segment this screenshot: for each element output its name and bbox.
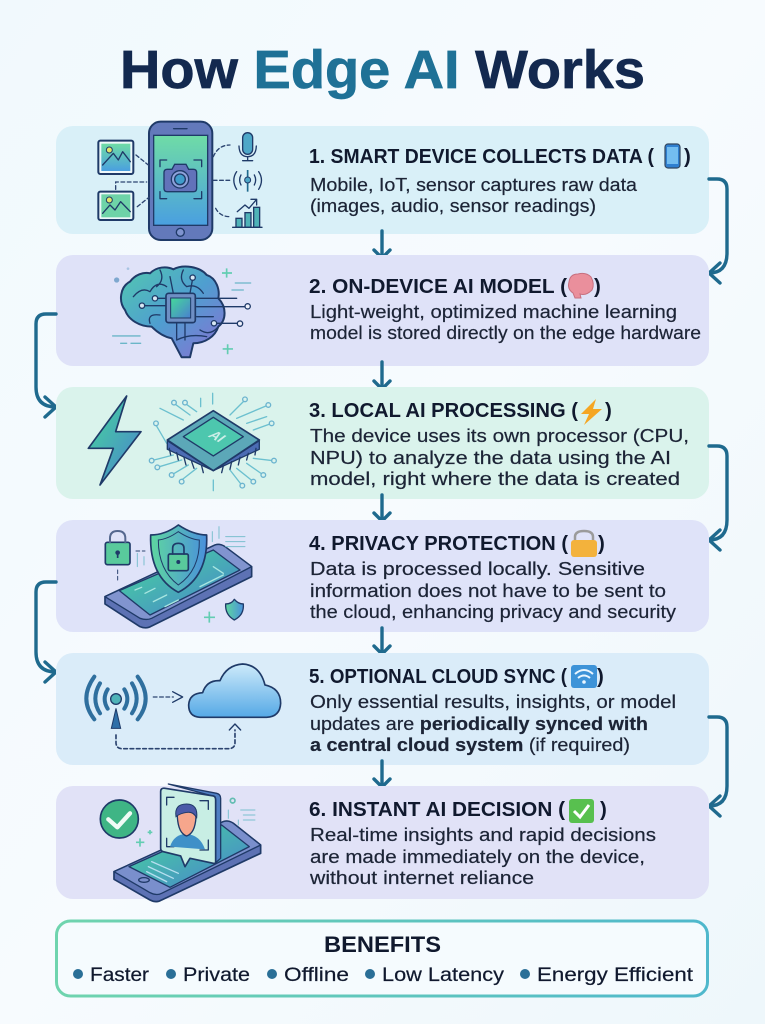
panel: step 3 local processing bbox=[56, 387, 709, 499]
panel: step 1 smart device bbox=[56, 122, 709, 240]
step 4 description: Data is processed locally. Sensitive bbox=[310, 559, 645, 579]
step 3 description: The device uses its own processor (CPU, bbox=[310, 426, 689, 446]
arrow: 1 to 2 side bbox=[709, 179, 727, 283]
step 6 description: are made immediately on the device, bbox=[310, 847, 645, 867]
step 3 description: model, right where the data is created bbox=[310, 469, 680, 489]
step 2 description bbox=[310, 302, 701, 343]
benefit: Energy Efficient: Energy Efficient bbox=[537, 965, 694, 986]
step 5 description: updates are periodically synced with bbox=[310, 714, 648, 734]
benefit: Offline bbox=[267, 965, 349, 986]
panel: step 4 privacy bbox=[56, 520, 709, 632]
step 3 heading: ) bbox=[605, 399, 612, 422]
step 5 heading: ) bbox=[597, 665, 604, 688]
arrow: 2 to 3 side bbox=[36, 314, 56, 417]
step 4 description: the cloud, enhancing privacy and security bbox=[310, 602, 676, 622]
arrow: 5 to 6 down bbox=[374, 761, 390, 787]
arrow: 2 to 3 down bbox=[374, 362, 390, 389]
arrow: 4 to 5 down bbox=[374, 628, 390, 654]
arrow: 3 to 4 side bbox=[709, 446, 727, 550]
step 3 description: NPU) to analyze the data using the AI bbox=[310, 448, 671, 468]
step 6 description: Real-time insights and rapid decisions bbox=[310, 825, 656, 845]
benefit: Faster: Faster bbox=[90, 965, 150, 986]
step 6 description: without internet reliance bbox=[309, 868, 534, 888]
emoji: check mark bbox=[569, 799, 594, 823]
arrow: 5 to 6 side bbox=[709, 717, 727, 816]
step 6 description bbox=[309, 825, 656, 888]
icon: bolt and AI chip bbox=[88, 393, 276, 491]
arrow: 4 to 5 side bbox=[36, 582, 56, 682]
step 1 heading: 1. SMART DEVICE COLLECTS DATA ( bbox=[309, 145, 654, 168]
icon: phone with shield bbox=[105, 525, 252, 628]
step 5 description bbox=[310, 692, 676, 755]
emoji: mobile phone bbox=[665, 144, 680, 168]
panel: benefits bbox=[56, 921, 708, 996]
step 3 description bbox=[310, 426, 689, 489]
step 6 heading: 6. INSTANT AI DECISION ( bbox=[309, 798, 565, 821]
panel: step 5 cloud sync bbox=[56, 653, 709, 765]
icon: phone with face recognition bbox=[100, 784, 261, 902]
step 5 description: a central cloud system (if required) bbox=[310, 735, 630, 755]
title: How Edge AI Works bbox=[120, 40, 645, 100]
step 2 heading: ) bbox=[594, 275, 601, 298]
panel: step 2 AI model bbox=[56, 255, 709, 366]
benefit: Offline: Offline bbox=[284, 965, 349, 986]
emoji: brain bbox=[568, 273, 593, 298]
step 6 heading: ) bbox=[600, 798, 607, 821]
icon: phone capturing data bbox=[98, 122, 262, 240]
benefit: Low Latency: Low Latency bbox=[382, 965, 505, 986]
step 2 description: Light-weight, optimized machine learning bbox=[310, 302, 677, 322]
emoji: wifi bbox=[571, 665, 597, 688]
benefit: Private: Private bbox=[183, 965, 250, 986]
emoji: lock bbox=[571, 531, 597, 557]
step 3 heading: 3. LOCAL AI PROCESSING ( bbox=[309, 399, 578, 422]
step 5 description: Only essential results, insights, or model bbox=[310, 692, 676, 712]
step 4 heading: ) bbox=[598, 532, 605, 555]
step 1 description: Mobile, IoT, sensor captures raw data bbox=[310, 175, 638, 195]
panel: step 6 instant decision bbox=[56, 784, 709, 902]
icon: bolt and AI chip: AI bbox=[205, 428, 230, 444]
icon: brain with chip bbox=[113, 267, 251, 357]
step 1 description: (images, audio, sensor readings) bbox=[310, 196, 596, 216]
icon: antenna and cloud bbox=[86, 664, 281, 749]
step 4 description bbox=[310, 559, 676, 622]
step 2 description: model is stored directly on the edge hardware bbox=[310, 323, 701, 343]
step 2 heading: 2. ON-DEVICE AI MODEL ( bbox=[309, 275, 567, 298]
step 4 heading: 4. PRIVACY PROTECTION ( bbox=[309, 532, 568, 555]
arrow: 3 to 4 down bbox=[374, 495, 390, 521]
benefits heading: BENEFITS bbox=[324, 932, 441, 957]
step 1 description bbox=[310, 175, 638, 216]
emoji: lightning bbox=[581, 399, 602, 425]
step 4 description: information does not have to be sent to bbox=[310, 581, 666, 601]
step 5 heading: 5. OPTIONAL CLOUD SYNC ( bbox=[309, 665, 567, 688]
step 1 heading: ) bbox=[684, 145, 691, 168]
arrow: 1 to 2 down bbox=[374, 231, 390, 258]
